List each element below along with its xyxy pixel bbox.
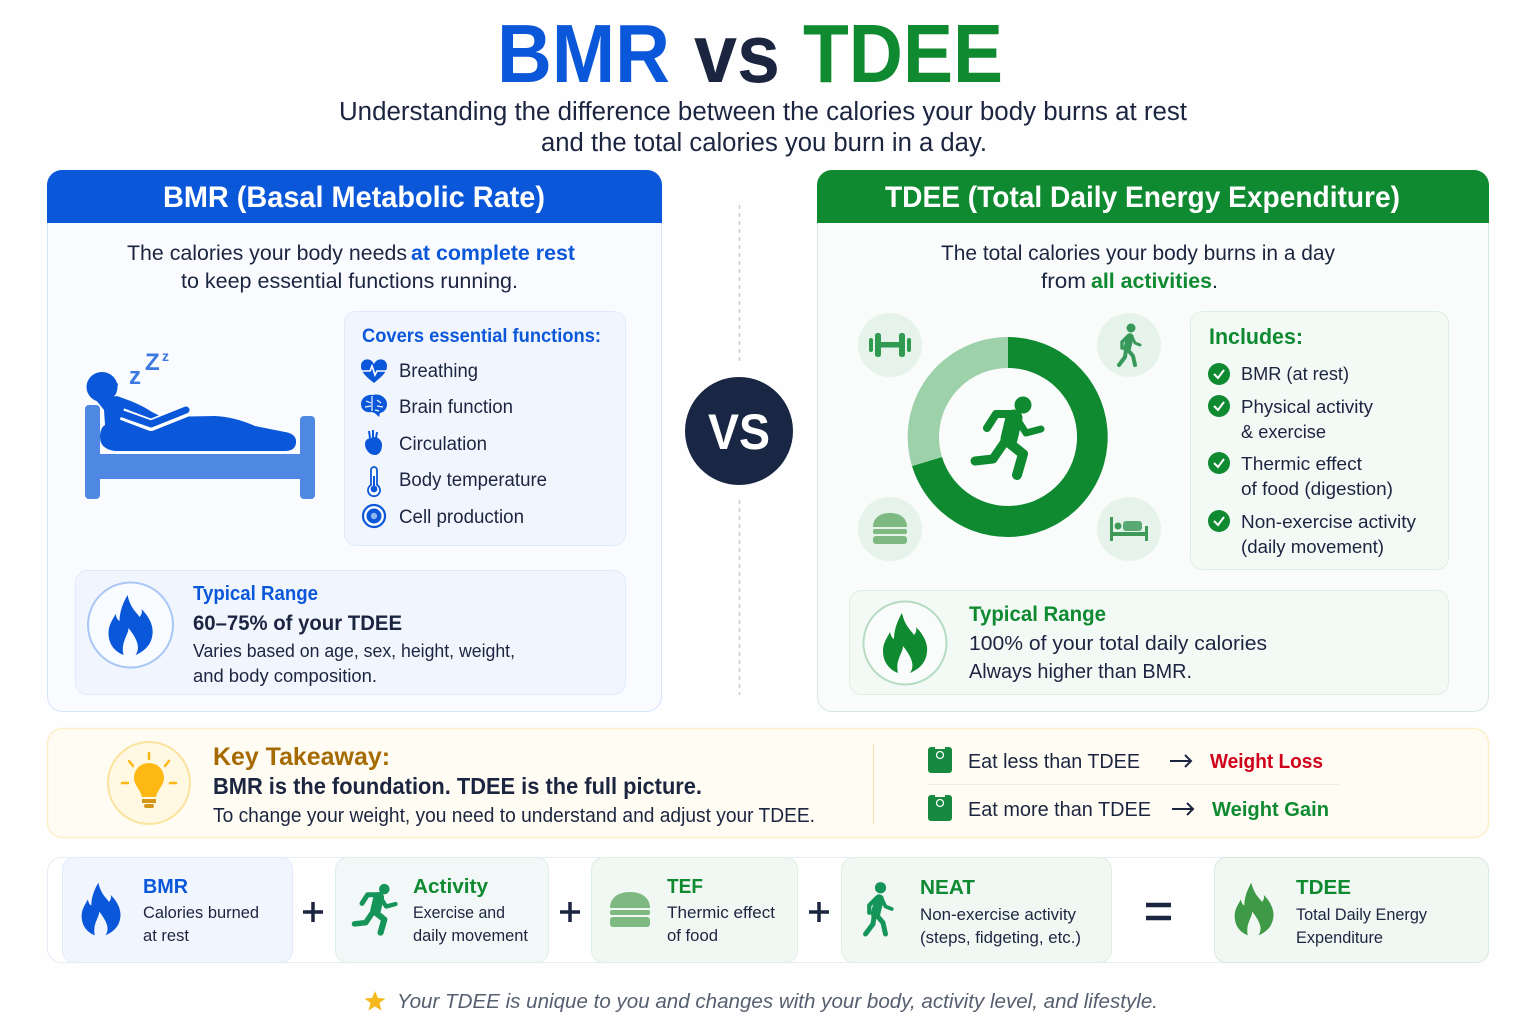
row: weight gain: Weight Gain <box>1212 798 1329 821</box>
card: TEF: of food <box>667 927 718 945</box>
row: weight loss: Weight Loss <box>1210 750 1323 773</box>
TDEE definition: The total calories your body burns in a day <box>941 241 1335 265</box>
title: vs <box>694 7 780 100</box>
title: TDEE <box>803 7 1003 100</box>
takeaway text: BMR is the foundation. TDEE is the full picture. <box>213 773 702 799</box>
card: Activity <box>336 858 548 962</box>
row: weight loss <box>928 747 1323 773</box>
illustration: person sleeping in bed: z <box>162 348 169 364</box>
icon: runner <box>975 396 1041 475</box>
box: essential functions: Covers essential functions: <box>362 326 601 347</box>
VS badge <box>685 377 793 485</box>
icon: dumbbell <box>858 313 922 377</box>
panel: BMR <box>47 170 662 712</box>
card: NEAT: (steps, fidgeting, etc.) <box>920 929 1081 947</box>
VS badge: VS <box>708 404 770 460</box>
illustration: person sleeping in bed <box>85 348 315 499</box>
card: TDEE: Expenditure <box>1296 929 1383 947</box>
check: BMR: BMR (at rest) <box>1241 363 1349 384</box>
card: TDEE: Total Daily Energy <box>1296 906 1428 924</box>
title <box>497 7 1003 100</box>
title: BMR <box>497 7 670 100</box>
icon: cell <box>363 505 385 527</box>
box: TDEE typical range <box>850 590 1448 694</box>
check: non-exercise activity <box>1208 510 1417 557</box>
TDEE definition <box>941 241 1335 293</box>
icon: burger <box>858 497 922 561</box>
box: BMR typical range: Varies based on age, sex, height, weight, <box>193 641 515 661</box>
takeaway text: To change your weight, you need to understand and adjust your TDEE. <box>213 805 815 827</box>
card: NEAT: Non-exercise activity <box>920 906 1077 924</box>
card: BMR: at rest <box>143 927 189 945</box>
box: essential functions <box>344 312 626 546</box>
check: physical activity: & exercise <box>1241 421 1326 442</box>
panel: key takeaway <box>48 728 1488 838</box>
check: thermic effect: of food (digestion) <box>1241 478 1393 499</box>
row: weight gain <box>928 795 1329 821</box>
BMR definition <box>127 241 575 293</box>
check: physical activity: Physical activity <box>1241 396 1374 417</box>
panel: TDEE <box>817 170 1489 712</box>
box: BMR typical range: and body composition. <box>193 666 377 686</box>
icon: heart with pulse <box>361 359 387 383</box>
BMR panel header <box>47 170 662 223</box>
card: TDEE <box>1214 858 1488 962</box>
icon: teal runner <box>355 884 395 933</box>
subtitle <box>339 98 1187 157</box>
subtitle: Understanding the difference between the calories your body burns at rest <box>339 98 1187 126</box>
card: Activity: daily movement <box>413 927 528 945</box>
card: BMR: Calories burned <box>143 904 259 922</box>
icon: teal walker <box>866 882 892 934</box>
card: TEF: Thermic effect <box>667 904 775 922</box>
card: Activity: Exercise and <box>413 904 505 922</box>
row: weight gain: Eat more than TDEE <box>968 798 1151 821</box>
icon: anatomical heart <box>365 430 382 455</box>
card: NEAT <box>842 858 1112 962</box>
box: BMR typical range <box>76 570 626 694</box>
box: includes list <box>1190 312 1448 570</box>
box: essential functions: Body temperature <box>399 470 547 491</box>
row: weight loss: Eat less than TDEE <box>968 750 1140 773</box>
card: Activity: Activity <box>413 875 489 898</box>
box: essential functions: Brain function <box>399 397 513 418</box>
TDEE panel header: TDEE (Total Daily Energy Expenditure) <box>885 181 1400 214</box>
icon: brain <box>361 395 387 417</box>
icon: walking person <box>1097 313 1161 377</box>
check: thermic effect: Thermic effect <box>1241 453 1362 474</box>
card: TEF <box>592 858 798 962</box>
BMR definition: to keep essential functions running. <box>181 269 518 293</box>
illustration: person sleeping in bed: z <box>129 363 141 390</box>
check: physical activity <box>1208 395 1374 442</box>
icon: green flame <box>864 602 946 684</box>
box: BMR typical range: 60–75% of your TDEE <box>193 611 402 635</box>
check: non-exercise activity: (daily movement) <box>1241 536 1384 557</box>
TDEE definition: . <box>1212 269 1218 293</box>
box: essential functions: Breathing <box>399 361 478 382</box>
TDEE panel header <box>817 170 1489 223</box>
card: TDEE: TDEE <box>1296 876 1351 899</box>
icon: light bulb <box>108 742 190 824</box>
TDEE definition: all activities <box>1091 269 1212 293</box>
card: BMR <box>62 858 292 962</box>
illustration: person sleeping in bed: Z <box>145 349 160 376</box>
subtitle: and the total calories you burn in a day. <box>541 129 987 157</box>
box: includes list: Includes: <box>1209 324 1303 349</box>
takeaway text <box>213 743 815 827</box>
BMR definition: The calories your body needs <box>127 241 407 265</box>
plus sign <box>303 902 323 922</box>
takeaway text: Key Takeaway: <box>213 743 390 771</box>
box: TDEE typical range: 100% of your total daily calories <box>969 632 1267 655</box>
box: TDEE typical range: Always higher than BMR. <box>969 660 1192 683</box>
plus sign <box>560 902 580 922</box>
box: BMR typical range: Typical Range <box>193 583 318 605</box>
TDEE definition: from <box>1041 269 1086 293</box>
card: TEF: TEF <box>667 875 703 898</box>
check: non-exercise activity: Non-exercise activity <box>1241 511 1417 532</box>
plus sign <box>809 902 829 922</box>
card: NEAT: NEAT <box>920 876 975 899</box>
card: BMR: BMR <box>143 876 189 898</box>
check: thermic effect <box>1208 452 1393 499</box>
BMR panel header: BMR (Basal Metabolic Rate) <box>163 181 545 214</box>
icon: burger <box>610 892 650 927</box>
icon: bed <box>1097 497 1161 561</box>
footer note: Your TDEE is unique to you and changes with your body, activity level, and lifestyle. <box>397 990 1158 1013</box>
equals sign <box>1146 905 1171 918</box>
box: TDEE typical range: Typical Range <box>969 603 1106 626</box>
box: essential functions: Circulation <box>399 434 487 455</box>
donut chart with activity icons <box>858 313 1161 561</box>
BMR definition: at complete rest <box>411 241 575 265</box>
box: essential functions: Cell production <box>399 507 524 528</box>
equation strip <box>48 858 1488 962</box>
icon: thermometer <box>368 467 380 496</box>
icon: blue flame <box>88 582 173 668</box>
